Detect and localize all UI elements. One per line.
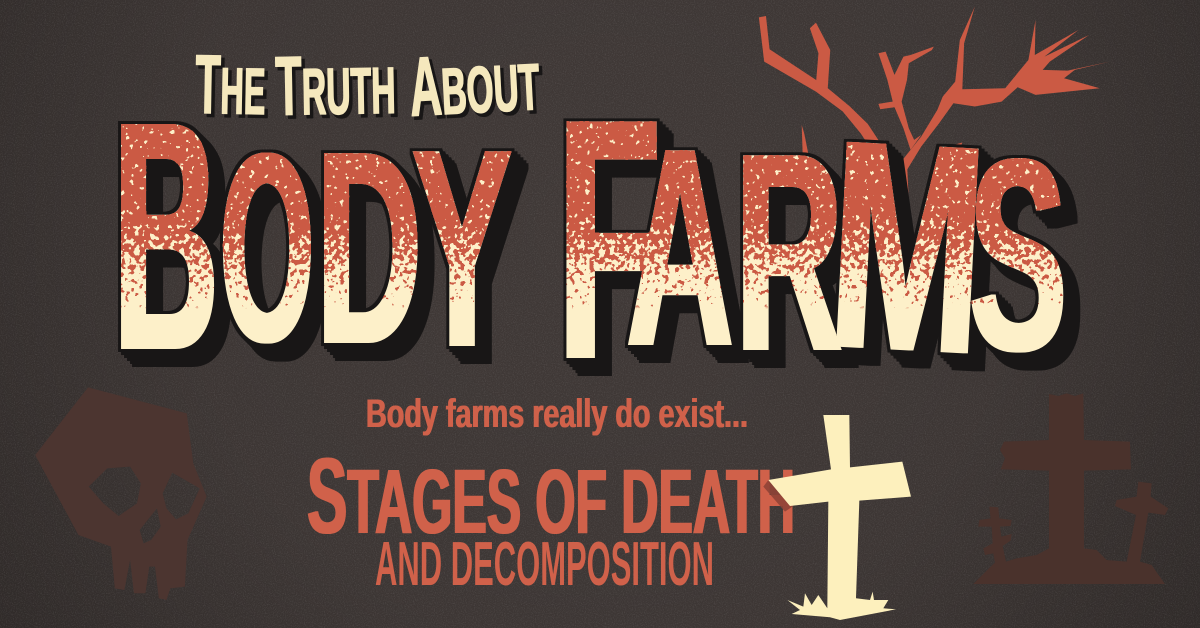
heading: The Truth About: THE — [195, 37, 266, 132]
title layer: black extruded shadow: R — [735, 93, 843, 410]
title layer: cream letters: B — [113, 53, 219, 419]
heading: Stages of Death: STAGES OF DEATH — [307, 435, 795, 556]
icon: faded graveyard crosses — [973, 393, 1168, 584]
text: AND DECOMPOSITION — [375, 530, 714, 599]
title layer: cream letters — [113, 47, 1067, 432]
title layer: red speckled tops: M — [823, 78, 992, 418]
title layer: red speckled tops — [121, 121, 1063, 309]
title layer: red speckled tops: F — [557, 47, 661, 432]
main title: BODY FARMS — [118, 118, 1080, 376]
title layer: red speckled tops: D — [316, 93, 422, 402]
title layer: black extruded shadow: F — [557, 47, 661, 432]
title layer: black extruded shadow — [113, 47, 1067, 432]
heading: The Truth About: TRUTH — [275, 37, 396, 133]
title layer: cream letters: F — [557, 47, 661, 432]
tree: trunk — [893, 163, 909, 236]
icon: faded skull — [35, 387, 207, 600]
title layer: red speckled tops: R — [735, 93, 843, 410]
title layer: red speckled tops: S — [969, 101, 1067, 409]
title layer: cream letters: R — [735, 93, 843, 410]
title layer: red speckled tops: O — [220, 98, 314, 399]
tree: left twig — [810, 23, 830, 88]
title layer: cream letters: Y — [412, 90, 512, 406]
title layer: cream letters: A — [626, 88, 734, 405]
title layer: red speckled tops: Y — [412, 90, 512, 406]
title layer: black extruded shadow: M — [823, 78, 992, 418]
tree: right limb — [895, 7, 1110, 170]
title layer: cream letters: O — [220, 98, 314, 399]
title layer: cream letters: D — [316, 93, 422, 402]
title layer: cream letters: M — [823, 78, 992, 418]
title layer: black extruded shadow: Y — [412, 90, 512, 406]
title layer: black extruded shadow: B — [113, 53, 219, 419]
tree: left limb — [759, 16, 898, 173]
title layer: black extruded shadow: S — [969, 101, 1067, 409]
icon: cream cross with grass — [763, 415, 911, 620]
heading: The Truth About — [195, 33, 542, 134]
subheading: Body farms really do exist: Body farms really do exist... — [366, 392, 748, 436]
title layer: black extruded shadow: O — [220, 98, 314, 399]
title layer: red speckled tops: B — [113, 53, 219, 419]
tree: centre branch — [878, 47, 934, 150]
title layer: black extruded shadow: A — [626, 88, 734, 405]
title layer: cream letters: S — [969, 101, 1067, 409]
icon: bare red tree — [759, 7, 1110, 236]
title layer: black extruded shadow: D — [316, 93, 422, 402]
title layer: red speckled tops: A — [626, 88, 734, 405]
heading: The Truth About: ABOUT — [407, 33, 542, 134]
